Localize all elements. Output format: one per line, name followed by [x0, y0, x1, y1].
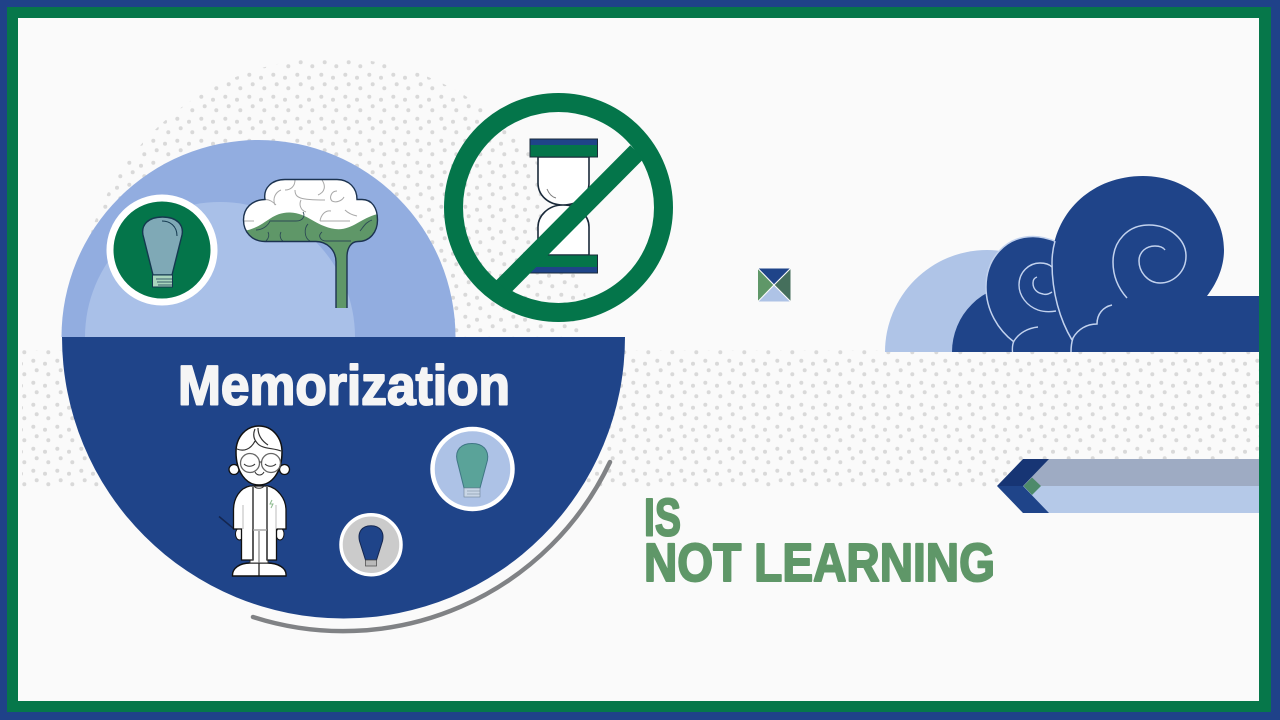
text: IS NOT LEARNING: IS [644, 488, 681, 548]
clouds illustration [885, 176, 1259, 352]
icon: green lightbulb [110, 198, 214, 302]
text: IS NOT LEARNING: NOT LEARNING [644, 533, 995, 593]
icon: teal lightbulb [432, 429, 512, 509]
text: IS NOT LEARNING [644, 488, 995, 593]
arrow [997, 459, 1259, 513]
icon: navy lightbulb [341, 515, 401, 575]
icon: no hourglass sign [454, 102, 664, 312]
dotted band [22, 350, 1259, 487]
dotted circle backdrop [78, 58, 586, 566]
heading: Memorization: Memorization [178, 354, 510, 416]
hourglass [530, 139, 598, 273]
panel: upper half circle [62, 140, 456, 337]
grey arc under main circle [253, 462, 610, 631]
figure: student with wand [219, 426, 290, 576]
icon: small four-triangle square [758, 268, 791, 302]
panel: lower half circle [62, 337, 625, 618]
icon: brain tree [243, 180, 378, 310]
